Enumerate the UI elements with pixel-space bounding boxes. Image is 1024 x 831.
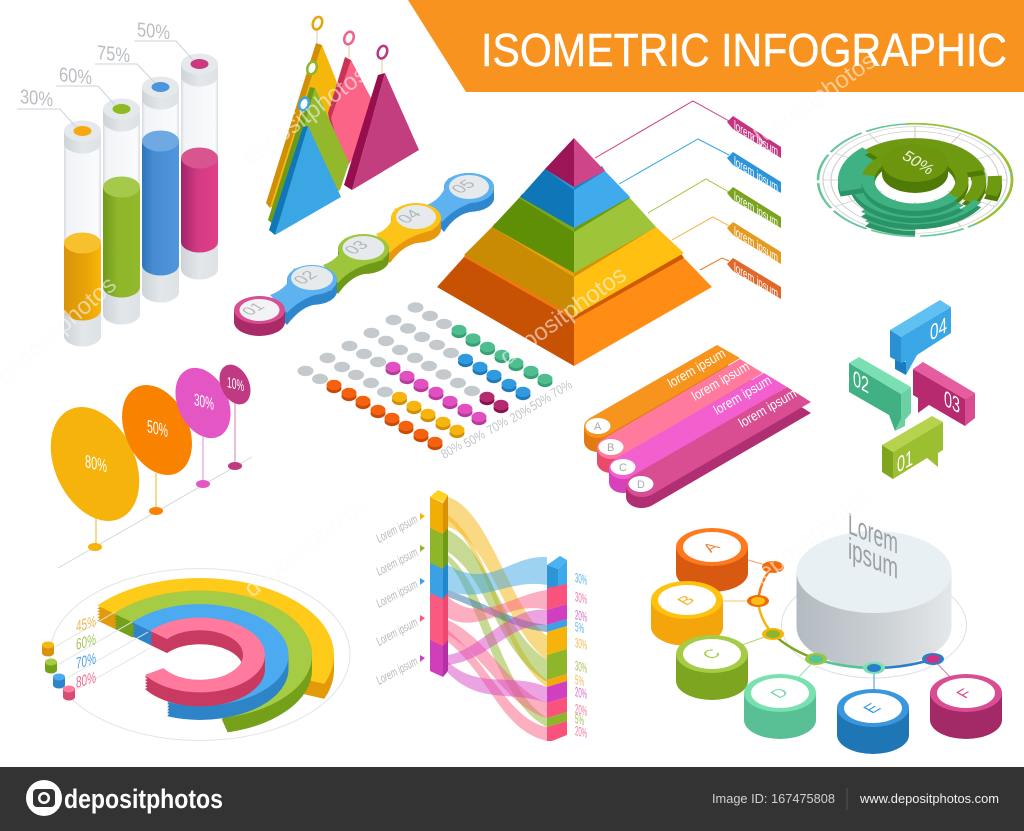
- sankey markers: [420, 513, 425, 662]
- ribbon list A-D: [584, 345, 811, 508]
- sankey flows: [448, 497, 547, 741]
- step 03: 03: [340, 238, 373, 257]
- callout tag 4: [727, 222, 781, 266]
- cylinder A: [676, 528, 748, 592]
- dot labels: 70%: [484, 413, 511, 438]
- step 04: 04: [393, 207, 426, 226]
- green dots: [452, 325, 552, 387]
- pyramid callouts: [595, 101, 781, 302]
- watermark text: depositphotos: [742, 481, 876, 595]
- website: www.depositphotos.com: [859, 791, 999, 806]
- text: 30%: [575, 570, 587, 588]
- sankey left labels: Lorem ipsum: [374, 615, 420, 649]
- balloon 80%: 80%: [85, 450, 107, 476]
- dot matrix: [298, 302, 575, 462]
- watermark text: depositphotos: [237, 60, 373, 172]
- tube 75%: [142, 76, 179, 302]
- balloon 80%: [33, 393, 157, 551]
- green arc: [59, 574, 341, 751]
- ribbon A: A: [594, 421, 602, 433]
- right green sectors: [828, 130, 1002, 235]
- bubble 03: 03: [944, 386, 960, 419]
- ribbon C: lorem ipsum: [711, 373, 774, 418]
- speech bubbles: [849, 300, 975, 479]
- grey dots: [298, 302, 480, 397]
- stems and rings: [311, 16, 389, 74]
- text: 30%: [575, 589, 587, 607]
- guide ellipse: [782, 572, 966, 678]
- green layer: [492, 198, 574, 273]
- balloon 10%: [213, 360, 257, 470]
- callout tag 2: lorem ipsum: [734, 154, 778, 196]
- central cylinder: [796, 506, 952, 668]
- top green block: [834, 133, 996, 232]
- step 05: [427, 173, 494, 232]
- bubble 03: [913, 362, 975, 426]
- sankey right labels: 5%: [575, 711, 584, 728]
- step 02: 02: [289, 268, 322, 287]
- blue arc: [92, 593, 308, 731]
- text: 20%: [575, 701, 587, 719]
- arc legend: 80%: [76, 669, 96, 692]
- cylinder D: D: [766, 685, 793, 701]
- balloon 50%: 50%: [147, 415, 168, 441]
- ribbon B: lorem ipsum: [689, 359, 752, 404]
- dot labels: 50%: [527, 389, 554, 414]
- cylinder C: C: [698, 646, 725, 662]
- text: 20%: [575, 684, 587, 702]
- tube 60%: [103, 98, 140, 324]
- right column: [547, 556, 567, 741]
- cylinder B: B: [673, 593, 699, 608]
- central cylinder: ipsum: [848, 531, 898, 586]
- ribbon D: lorem ipsum: [736, 386, 799, 431]
- callout tag 1: lorem ipsum: [734, 118, 778, 160]
- timeline curve: [758, 567, 933, 668]
- text: 20%: [575, 723, 587, 741]
- sankey left labels: Lorem ipsum: [374, 512, 420, 546]
- left teal block: [839, 136, 991, 229]
- numbered steps 01-05: [234, 173, 494, 336]
- step 01: 01: [239, 301, 269, 318]
- bubble 01: [882, 416, 943, 479]
- footer bar: [0, 767, 1024, 831]
- bubble 04: 04: [930, 313, 947, 347]
- tube chart: [17, 19, 218, 347]
- sankey right labels: [575, 570, 587, 741]
- balloon 10%: 10%: [227, 374, 244, 395]
- step 01: [234, 296, 285, 336]
- arc legend: 70%: [76, 650, 96, 673]
- step 02: [269, 265, 337, 325]
- arc legend: 45%: [76, 613, 96, 636]
- footer logo: depositphotos: [64, 784, 223, 814]
- radial arc chart: [27, 555, 373, 770]
- yellow arc: [27, 555, 373, 770]
- dot labels: 50%: [461, 426, 488, 451]
- cylinder E: [837, 689, 909, 754]
- ribbon A: lorem ipsum: [665, 346, 728, 391]
- watermark text: depositphotos: [495, 261, 631, 371]
- dot labels: 70%: [548, 376, 575, 401]
- bubble 02: [849, 357, 911, 431]
- yellow dots: [392, 392, 464, 438]
- callout tag 5: lorem ipsum: [734, 260, 778, 302]
- connector lines: [723, 560, 950, 690]
- blue dots: [458, 354, 530, 400]
- magenta prism: [344, 73, 385, 190]
- ribbon A: [584, 345, 740, 452]
- sankey left labels: [374, 512, 420, 688]
- timeline nodes: [747, 561, 944, 674]
- central cylinder: Lorem: [848, 506, 898, 561]
- pink arc: [124, 611, 276, 713]
- ribbon B: B: [607, 442, 614, 454]
- tube 50%: [181, 54, 218, 280]
- grid rings: [810, 119, 1020, 241]
- cylinder A: A: [698, 539, 725, 555]
- callout tag 4: lorem ipsum: [734, 224, 778, 266]
- blue layer: [520, 169, 574, 228]
- balloon 50%: [108, 374, 206, 515]
- tube labels: 60%: [59, 64, 92, 89]
- leader lines: [595, 101, 729, 270]
- sankey left labels: Lorem ipsum: [374, 577, 420, 611]
- callout tag 3: lorem ipsum: [734, 189, 778, 231]
- pink prism: [328, 57, 351, 150]
- cylinder D: [744, 674, 816, 739]
- bubble 04: [890, 300, 951, 375]
- watermark text: depositphotos: [743, 47, 881, 155]
- callout tag 1: [727, 116, 781, 160]
- dot labels: 80%: [438, 437, 465, 462]
- left column: [430, 490, 448, 677]
- cylinder F: [930, 674, 1002, 739]
- outer bottom teal sector: [832, 132, 998, 233]
- ribbon C: [609, 373, 787, 493]
- watermark text: depositphotos: [239, 489, 373, 603]
- dot labels: [438, 376, 575, 462]
- callout tag 5: [727, 258, 781, 302]
- dark magenta dots: [480, 392, 508, 413]
- triangle prisms: [266, 16, 419, 235]
- blue prism: [269, 126, 308, 235]
- cylinder F: F: [952, 686, 977, 701]
- text: 20%: [575, 607, 587, 625]
- cylinder E: E: [859, 701, 885, 716]
- sankey left labels: Lorem ipsum: [374, 654, 420, 688]
- tube labels: 50%: [137, 19, 170, 44]
- green prism: [268, 87, 315, 226]
- center disc: [882, 144, 948, 193]
- arc legend: 60%: [76, 631, 96, 654]
- yellow layer: [464, 227, 574, 316]
- radial chart 50%: [810, 119, 1020, 242]
- tube labels: 75%: [97, 42, 130, 67]
- balloon 30%: 30%: [194, 389, 214, 414]
- bubble 01: 01: [897, 446, 913, 479]
- arc legend: [42, 612, 150, 701]
- tube labels: 30%: [20, 86, 53, 111]
- callout tag 3: [727, 187, 781, 231]
- ribbon D: [626, 386, 811, 508]
- pyramid: [437, 138, 712, 366]
- orange dots: [326, 380, 442, 450]
- text: 30%: [575, 658, 587, 676]
- tube 30%: [64, 120, 101, 346]
- inner ring: [850, 142, 980, 223]
- sankey right labels: 5%: [575, 619, 584, 636]
- cylinder C: [676, 635, 748, 700]
- balloon 30%: [165, 359, 241, 488]
- sankey left labels: Lorem ipsum: [374, 545, 420, 579]
- ribbon D: D: [637, 479, 645, 491]
- sankey right labels: 5%: [575, 672, 584, 689]
- step 04: [374, 203, 441, 263]
- mid bottom teal sector: [817, 123, 1013, 242]
- watermark text: [0, 47, 881, 603]
- tube labels: [17, 19, 193, 127]
- ribbon C: C: [619, 462, 627, 474]
- text: 30%: [575, 635, 587, 653]
- step 03: [322, 234, 389, 294]
- cylinder B: [651, 581, 723, 646]
- footer logo: [26, 780, 223, 816]
- dot labels: 20%: [507, 401, 534, 426]
- orange layer: [437, 257, 574, 366]
- yellow prism: [266, 43, 322, 208]
- magenta dots: [386, 362, 486, 425]
- sankey chart: [374, 490, 587, 741]
- bubble 02: 02: [853, 366, 869, 399]
- ribbon B: [597, 359, 763, 473]
- title banner: [408, 0, 1024, 92]
- cylinder process diagram: [651, 506, 1002, 754]
- center disc: 50%: [898, 148, 937, 178]
- step 05: 05: [447, 177, 480, 196]
- top layer: [545, 138, 574, 187]
- image id: Image ID: 167475808: [712, 791, 835, 806]
- outer guide ellipse: [50, 568, 350, 740]
- balloon chart: [33, 359, 257, 568]
- callout tag 2: [727, 152, 781, 196]
